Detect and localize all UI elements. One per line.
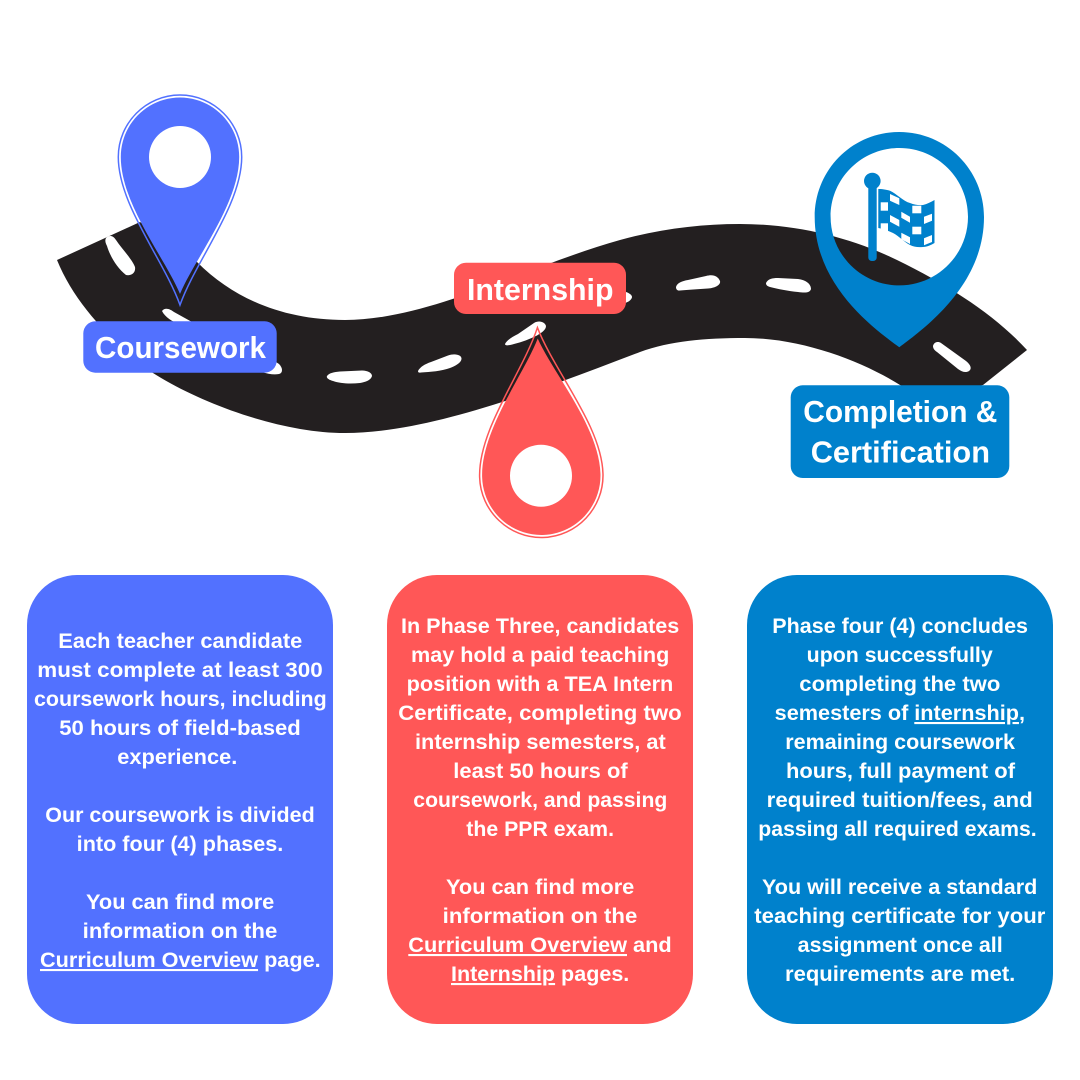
panel: internship: position with a TEA Intern [407,673,673,696]
pin: internship [476,326,605,539]
label: internship: Internship [467,272,614,307]
panel: internship: may hold a paid teaching [411,644,669,667]
panel: completion and certification: hours, full payment of [786,760,1016,783]
panel: internship: Certificate, completing two [398,702,682,725]
panel: completion and certification [747,575,1053,1024]
panel: internship: In Phase Three, candidates [401,615,679,638]
panel: coursework [27,575,333,1024]
winding road [57,222,1027,433]
panel: coursework: must complete at least 300 [37,659,323,682]
label: coursework [83,321,277,373]
panel: completion and certification: upon successfully [807,644,993,667]
panel: internship: Curriculum Overview and [408,934,672,957]
panel: completion and certification: remaining coursework [785,731,1015,754]
label: completion and certification: Completion & [803,394,997,429]
panel: coursework: experience. [117,746,237,769]
panel: completion and certification: Phase four (4) concludes [772,615,1028,638]
panel: coursework: Our coursework is divided [45,804,315,827]
panel: completion and certification: completing the two [799,673,1000,696]
panel: completion and certification: required tuition/fees, and [767,789,1033,812]
panel: coursework: information on the [83,920,277,943]
panel: internship: information on the [443,905,637,928]
panel: coursework: into four (4) phases. [77,833,283,856]
panel: coursework: 50 hours of field-based [59,717,301,740]
panel: coursework: coursework hours, including [34,688,327,711]
pin: completion [815,132,984,347]
label: coursework: Coursework [95,330,267,365]
panel: completion and certification: requirements are met. [785,963,1015,986]
panel: internship: the PPR exam. [466,818,614,841]
label: internship [454,263,626,314]
pin: coursework [118,95,242,305]
panel: completion and certification: You will receive a standard [762,876,1037,899]
panel: coursework: Curriculum Overview page. [40,949,321,972]
panel: internship: internship semesters, at [415,731,666,754]
panel: coursework: Each teacher candidate [58,630,302,653]
label: completion and certification [791,385,1009,478]
panel: internship: coursework, and passing [413,789,667,812]
panel: internship: least 50 hours of [453,760,629,783]
panel: completion and certification: teaching certificate for your [754,905,1045,928]
panel: internship: Internship pages. [451,963,629,986]
panel: internship [387,575,693,1024]
panel: completion and certification: semesters of internship, [775,702,1025,725]
label: completion and certification: Certification [811,434,990,470]
icon: checkered flag [864,173,934,261]
panel: coursework: You can find more [86,891,274,914]
panel: completion and certification: passing all required exams. [758,818,1037,841]
panel: internship: You can find more [446,876,634,899]
panel: completion and certification: assignment once all [798,934,1003,957]
